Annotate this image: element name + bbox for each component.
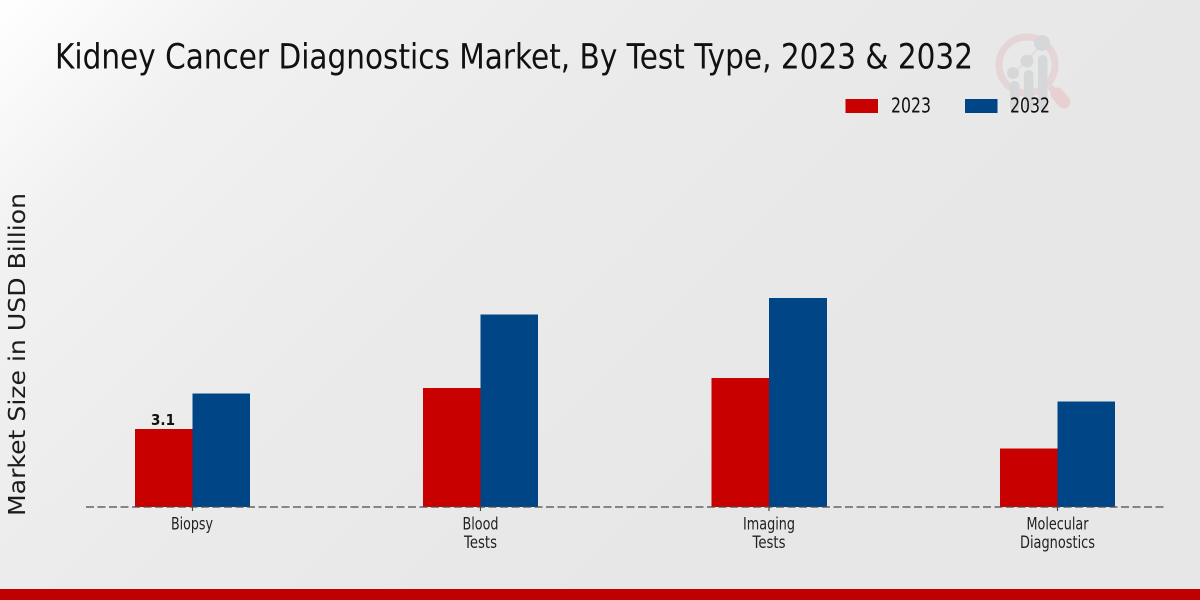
label: Imaging Tests: Imaging <box>743 514 795 534</box>
bars: Blood Tests <box>423 314 538 507</box>
data label: 3.1 <box>151 411 175 429</box>
label: Imaging Tests <box>743 514 795 552</box>
label: Blood Tests: Tests <box>463 533 497 552</box>
legend label 2032: 2032 <box>1010 94 1050 118</box>
bars: Imaging Tests <box>712 298 827 507</box>
label: Molecular Diagnostics <box>1020 514 1095 552</box>
bars: Biopsy <box>135 394 250 507</box>
baseline with ticks <box>86 507 1164 511</box>
label: Molecular Diagnostics: Diagnostics <box>1020 533 1095 552</box>
label: Biopsy: Biopsy <box>171 514 213 534</box>
label: Molecular Diagnostics: Molecular <box>1026 514 1089 534</box>
label: Blood Tests: Blood <box>462 514 498 534</box>
bars: Molecular Diagnostics <box>1000 402 1115 507</box>
legend label 2023: 2023 <box>891 94 931 118</box>
label: Blood Tests <box>462 514 498 552</box>
y axis title: Market Size in USD Billion <box>3 193 31 516</box>
bottom bar <box>0 589 1200 600</box>
label: Imaging Tests: Tests <box>752 533 786 552</box>
legend swatch 2032 <box>965 99 998 113</box>
legend swatch 2023 <box>846 99 878 113</box>
legend <box>846 94 1050 118</box>
watermark logo <box>999 35 1064 111</box>
bar chart <box>86 298 1164 511</box>
title: Kidney Cancer Diagnostics Market, By Test Type, 2023 & 2032 <box>55 38 973 78</box>
category labels <box>171 514 1095 552</box>
